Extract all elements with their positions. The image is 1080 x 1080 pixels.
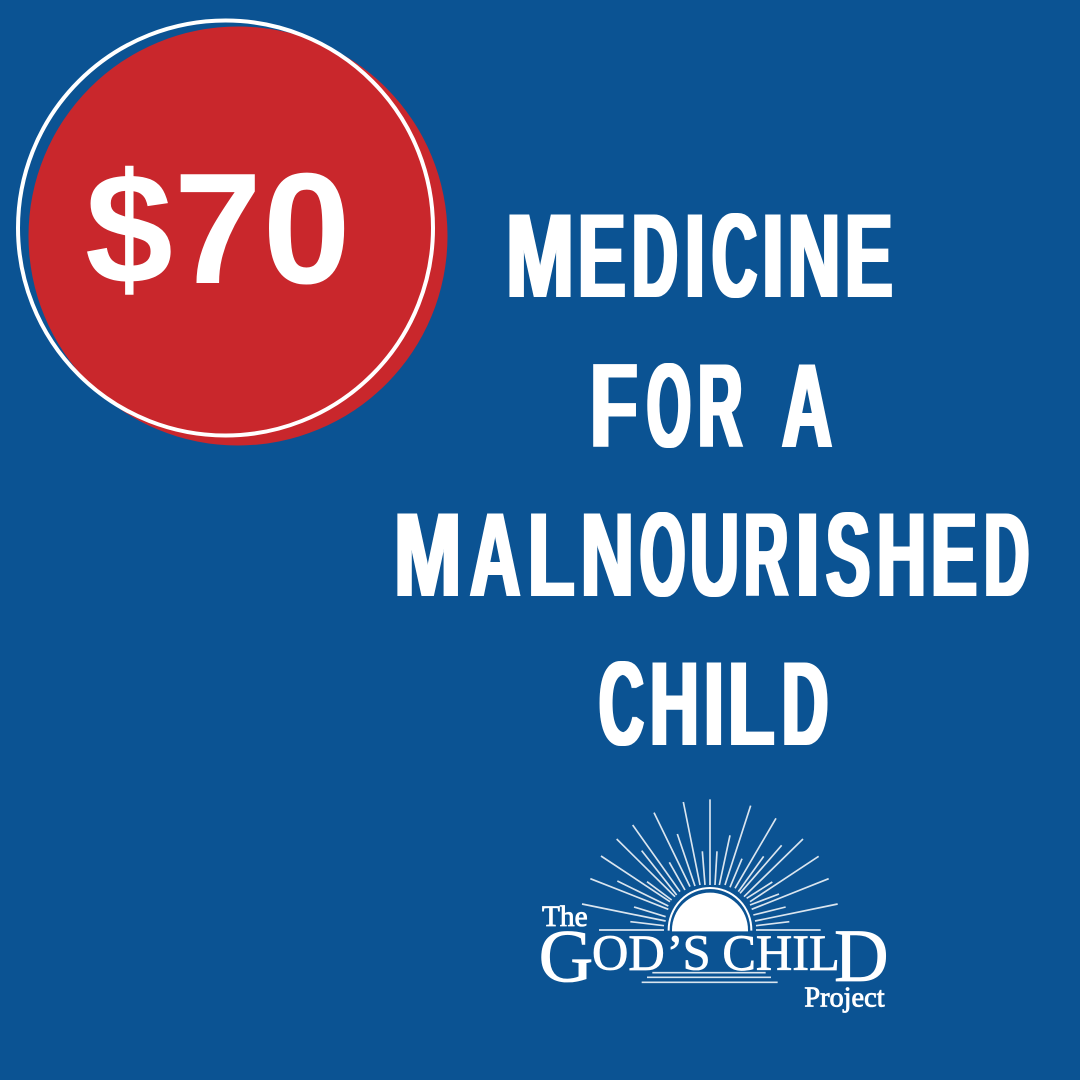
- heading line: MEDICINE: E: [578, 189, 625, 323]
- heading line: MEDICINE: D: [632, 189, 678, 323]
- heading line: MALNOURISHED: D: [984, 488, 1029, 622]
- white ring: [18, 20, 433, 436]
- logo: The God's Child Project: [539, 799, 889, 1014]
- heading line: MALNOURISHED: N: [581, 488, 633, 622]
- heading line: MALNOURISHED: I: [795, 488, 820, 622]
- heading line: FOR A: A: [782, 339, 832, 473]
- logo wordmark: ’: [667, 925, 683, 981]
- price: $70: [85, 141, 352, 317]
- heading line: MEDICINE: M: [506, 189, 574, 323]
- heading line: MALNOURISHED: U: [690, 488, 739, 622]
- heading line: CHILD: L: [728, 637, 775, 771]
- heading line: MALNOURISHED: S: [826, 488, 870, 622]
- heading line: MEDICINE: N: [788, 189, 840, 323]
- heading line: MALNOURISHED: E: [931, 488, 977, 622]
- heading line: MEDICINE: I: [762, 189, 784, 323]
- logo wordmark: S: [683, 925, 711, 981]
- heading line: MALNOURISHED: [394, 488, 1029, 622]
- red circle: [28, 26, 448, 446]
- logo wordmark: OD: [592, 925, 665, 981]
- heading line: FOR A: O: [647, 339, 690, 473]
- heading line: MALNOURISHED: R: [744, 488, 788, 622]
- heading line: FOR A: R: [698, 339, 742, 473]
- price badge: [18, 20, 448, 446]
- heading line: CHILD: I: [704, 637, 723, 771]
- logo wordmark: The: [542, 901, 588, 933]
- icon: half sun: [669, 888, 751, 931]
- heading line: MEDICINE: [506, 189, 892, 323]
- heading line: MALNOURISHED: L: [528, 488, 575, 622]
- logo wordmark: [539, 901, 889, 1014]
- heading line: CHILD: C: [599, 637, 644, 771]
- heading line: FOR A: F: [590, 339, 638, 473]
- heading line: MALNOURISHED: H: [877, 488, 926, 622]
- heading line: MALNOURISHED: A: [470, 488, 520, 622]
- logo wordmark: D: [834, 915, 889, 998]
- heading line: CHILD: [599, 637, 828, 771]
- logo wordmark: Project: [804, 983, 885, 1014]
- logo wordmark: G: [539, 916, 593, 999]
- heading line: MEDICINE: E: [845, 189, 892, 323]
- heading line: FOR A: [590, 339, 832, 473]
- logo wordmark: CHIL: [722, 925, 840, 981]
- heading line: MALNOURISHED: M: [394, 488, 461, 622]
- heading line: MEDICINE: I: [685, 189, 705, 323]
- heading line: MALNOURISHED: O: [640, 488, 685, 622]
- heading line: CHILD: D: [782, 637, 828, 771]
- heading line: MEDICINE: C: [712, 189, 757, 323]
- icon: sunrise rays: [582, 799, 838, 982]
- heading line: CHILD: H: [650, 637, 699, 771]
